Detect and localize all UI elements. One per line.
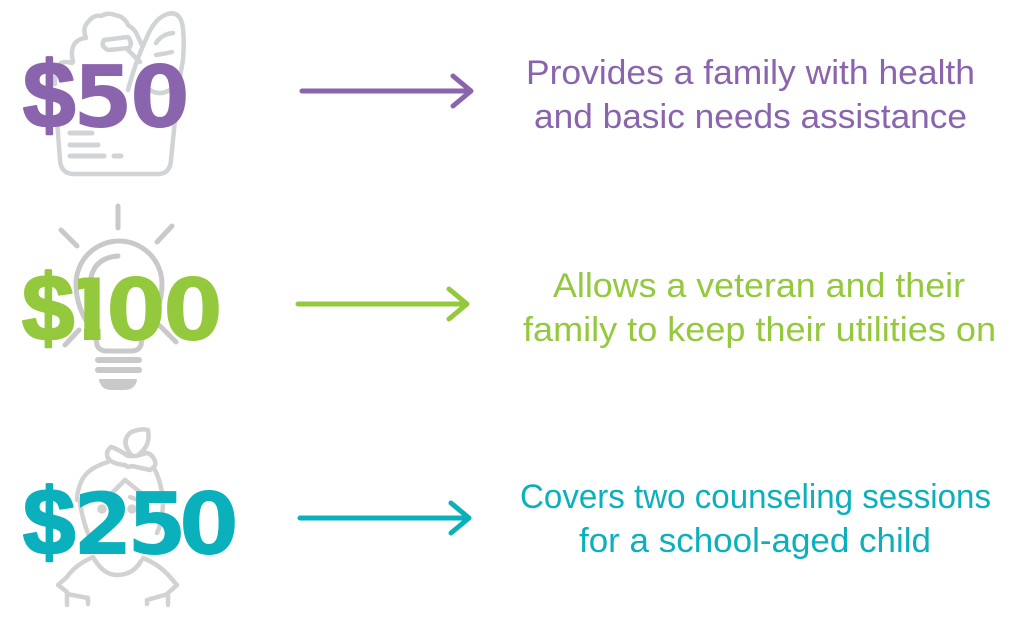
arrow: green [298, 289, 467, 319]
amount: $250: 250 [73, 475, 239, 575]
amount: $50: $ [23, 42, 75, 147]
amount: $50: 50 [73, 48, 190, 148]
amount: $250: $ [23, 469, 75, 574]
row: $50 donation [23, 13, 975, 174]
description: $50: and basic needs assistance [534, 98, 967, 136]
description: $250: for a school-aged child [579, 522, 931, 560]
description: $50: Provides a family with health [526, 54, 975, 92]
amount: $100: 00 [106, 261, 223, 361]
icon: light bulb [61, 206, 176, 389]
description: $250: Covers two counseling sessions [520, 478, 991, 516]
icon: grocery bag [55, 13, 184, 174]
row: $250 donation [23, 429, 991, 605]
description: $100: family to keep their utilities on [523, 311, 996, 349]
row: $100 donation [22, 206, 996, 389]
amount: $100: 1 [60, 261, 120, 361]
icon: child with hair bow [58, 429, 177, 605]
arrow: teal [300, 503, 469, 533]
amount: $50 [23, 42, 190, 148]
description: $100: Allows a veteran and their [553, 267, 965, 305]
amount: $100: $ [22, 255, 74, 360]
arrow: purple [302, 76, 471, 106]
amount: $100 [22, 269, 219, 348]
